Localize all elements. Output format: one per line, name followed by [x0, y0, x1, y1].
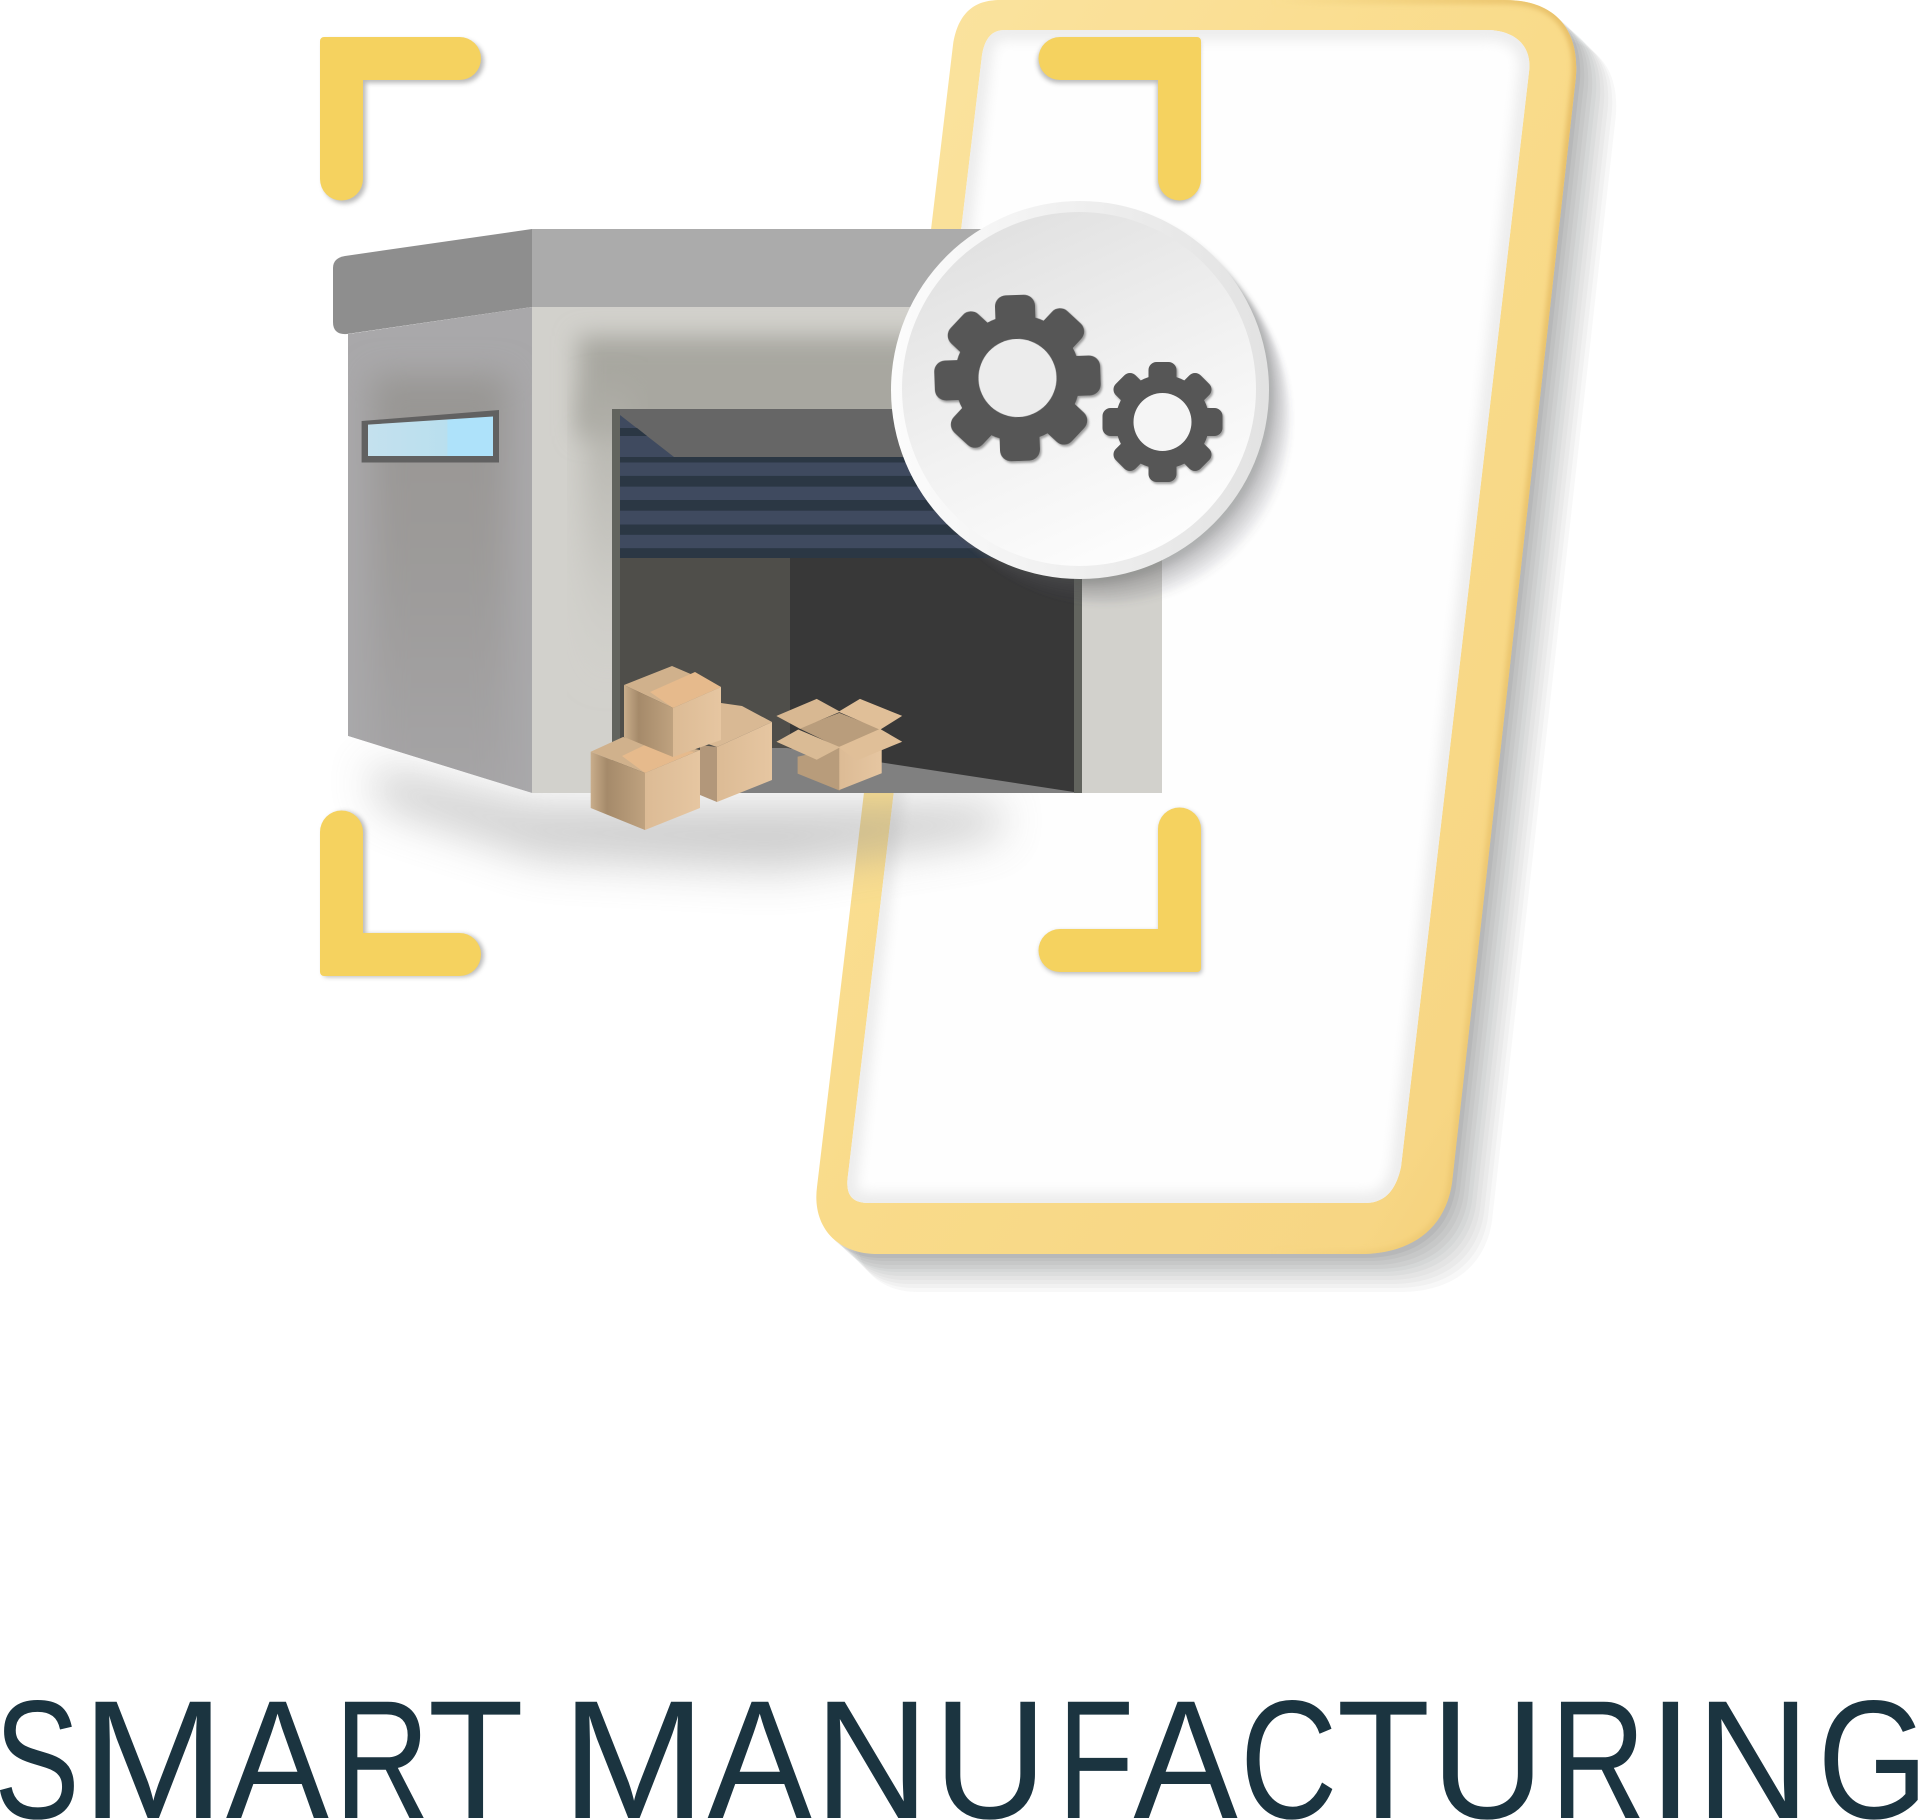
garage door opening [612, 409, 1082, 793]
gears badge [891, 201, 1292, 606]
box back right [700, 703, 772, 802]
badge shadow [896, 206, 1292, 606]
corner bracket top right [1038, 37, 1201, 204]
phone long shadow [820, 4, 1616, 1292]
floor shadow [370, 765, 1000, 870]
corner bracket bottom right [1038, 808, 1202, 974]
side window [362, 410, 499, 462]
warehouse left wall [348, 307, 532, 825]
small gear icon [1102, 362, 1222, 482]
corner bracket top left [320, 37, 484, 204]
smartphone [816, 0, 1576, 1254]
roof front side [532, 229, 1012, 307]
large gear icon [932, 292, 1103, 464]
roof left side [333, 229, 532, 334]
warehouse front wall [532, 307, 1218, 793]
corner bracket bottom left [320, 810, 484, 977]
warehouse building [333, 229, 1162, 793]
open cardboard box [777, 699, 901, 790]
cardboard boxes stack [591, 666, 772, 830]
box top [624, 666, 721, 757]
box bottom left [591, 737, 700, 830]
